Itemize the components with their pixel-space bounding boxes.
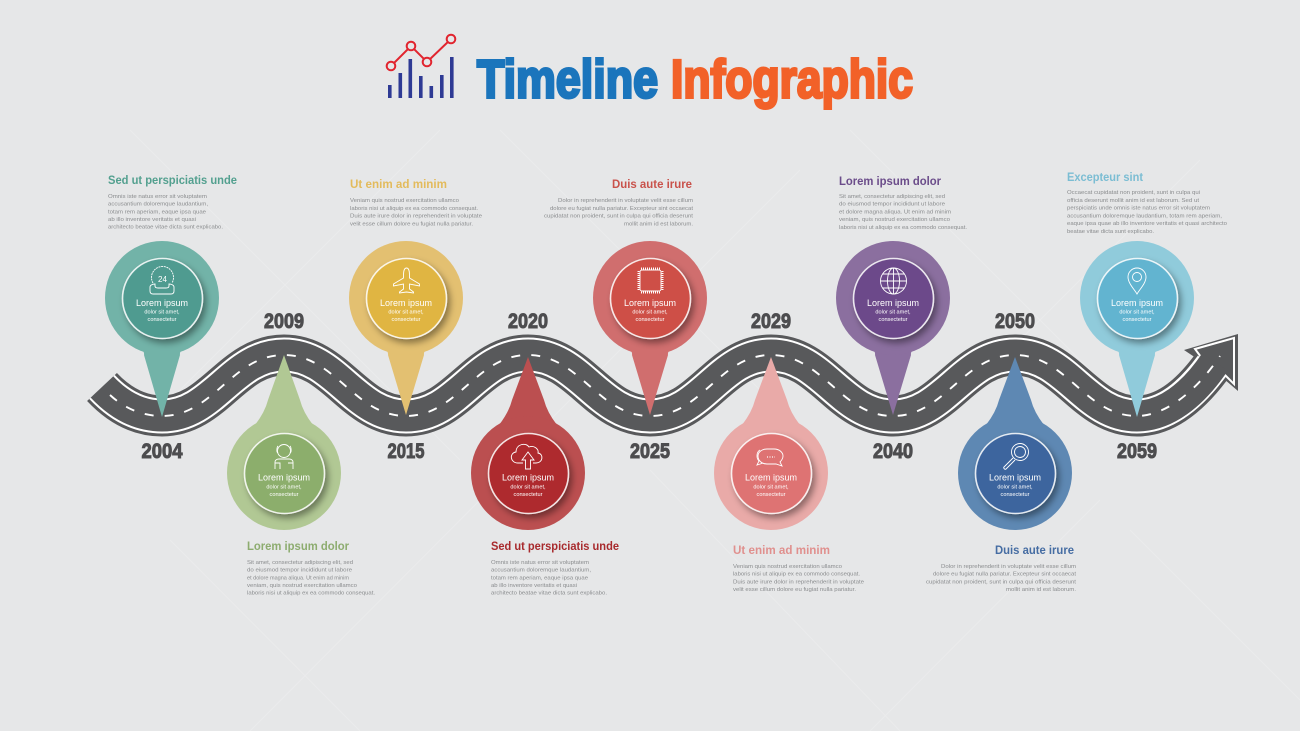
pin 2004: support	[105, 241, 219, 417]
pin 2009: headset agent: consectetur	[270, 492, 299, 498]
icon: chat bubbles	[757, 449, 783, 466]
pin 2025: microchip: Lorem ipsum	[624, 298, 676, 308]
pin 2025: microchip: consectetur	[636, 317, 665, 323]
pin 2004: support: consectetur	[148, 317, 177, 323]
text block: Ut enim ad minim (yellow): Ut enim ad minim	[350, 179, 447, 191]
text block: Lorem ipsum dolor (purple): do eiusmod tempor incididunt ut labore	[839, 202, 945, 208]
text block: Ut enim ad minim (pink): velit esse cillum dolore eu fugiat nulla pariatur.	[733, 587, 856, 593]
pin 2040: globe	[836, 241, 950, 415]
text block: Lorem ipsum dolor (green): laboris nisi ut aliquip ex ea commodo consequat.	[247, 591, 375, 597]
pin 2020: cloud upload: Lorem ipsum	[502, 472, 554, 482]
text block: Sed ut perspiciatis unde (dark red): accusantium doloremque laudantium,	[491, 568, 591, 574]
title	[387, 35, 913, 110]
text block: Ut enim ad minim (yellow): laboris nisi ut aliquip ex ea commodo consequat.	[350, 206, 478, 212]
text block: Sed ut perspiciatis unde (dark red): totam rem aperiam, eaque ipsa quae	[491, 575, 588, 581]
pin 2040: globe: Lorem ipsum	[867, 298, 919, 308]
icon: plane	[394, 268, 420, 293]
icon: globe	[880, 268, 906, 294]
pin 2009: headset agent: dolor sit amet,	[266, 484, 302, 490]
year labels: 2015	[388, 440, 425, 463]
title word: Infographic: Infographic	[671, 50, 913, 110]
year labels: 2029	[751, 310, 791, 333]
text block: Sed ut perspiciatis unde (dark red): Sed ut perspiciatis unde	[491, 541, 619, 553]
pin 2004: support: Lorem ipsum	[136, 298, 188, 308]
text block: Lorem ipsum dolor (green): veniam, quis nostrud exercitation ullamco	[247, 583, 357, 589]
text block: Sed ut perspiciatis unde (dark red): architecto beatae vitae dicta sunt explicabo.	[491, 591, 607, 597]
icon: chart with trend line	[387, 35, 455, 98]
text block: Duis aute irure (blue): dolore eu fugiat nulla pariatur. Excepteur sint occaecat	[933, 572, 1076, 578]
pin 2029: chat bubbles	[714, 357, 828, 530]
pin 2015: plane	[349, 241, 463, 415]
text block: Ut enim ad minim (yellow)	[350, 179, 482, 227]
text block: Sed ut perspiciatis unde (teal): ab illo inventore veritatis et quasi	[108, 217, 196, 223]
text block: Ut enim ad minim (pink): Ut enim ad minim	[733, 545, 830, 557]
text block: Duis aute irure (coral): Dolor in reprehenderit in voluptate velit esse cillum	[558, 198, 693, 204]
text block: Excepteur sint (cyan)	[1067, 172, 1227, 235]
icon: headset agent	[275, 444, 293, 469]
pin 2015: plane: Lorem ipsum	[380, 298, 432, 308]
text block: Duis aute irure (coral): dolore eu fugiat nulla pariatur. Excepteur sint occaecat	[550, 206, 693, 212]
pin 2025: microchip: dolor sit amet,	[632, 310, 668, 316]
pin 2025: microchip	[593, 241, 707, 415]
text block: Lorem ipsum dolor (green): Sit amet, consectetur adipiscing elit, sed	[247, 560, 353, 566]
pin 2050: magnifier: Lorem ipsum	[989, 472, 1041, 482]
pin 2029: chat bubbles: Lorem ipsum	[745, 472, 797, 482]
pin 2050: magnifier: consectetur	[1001, 492, 1030, 498]
text block: Duis aute irure (coral)	[544, 179, 693, 227]
text block: Sed ut perspiciatis unde (teal)	[108, 175, 237, 231]
text block: Lorem ipsum dolor (purple): et dolore magna aliqua. Ut enim ad minim	[839, 209, 951, 215]
text block: Lorem ipsum dolor (purple)	[839, 176, 967, 231]
icon: 24 hour phone	[150, 266, 174, 294]
text block: Sed ut perspiciatis unde (dark red)	[491, 541, 619, 597]
year labels: 2009	[264, 310, 304, 333]
icon: magnifier	[1004, 444, 1028, 469]
text block: Ut enim ad minim (pink): laboris nisi ut aliquip ex ea commodo consequat.	[733, 572, 860, 578]
pin 2050: magnifier: dolor sit amet,	[997, 484, 1033, 490]
pin 2029: chat bubbles: dolor sit amet,	[753, 484, 789, 490]
text block: Sed ut perspiciatis unde (teal): Sed ut perspiciatis unde	[108, 175, 237, 187]
text block: Excepteur sint (cyan): officia deserunt mollit anim id est laborum. Sed ut	[1067, 198, 1199, 204]
text block: Sed ut perspiciatis unde (teal): architecto beatae vitae dicta sunt explicabo.	[108, 225, 223, 231]
pin 2004: support: 24	[158, 275, 167, 284]
text block: Excepteur sint (cyan): eaque ipsa quae ab illo inventore veritatis et quasi architecto	[1067, 221, 1227, 227]
text block: Ut enim ad minim (yellow): Veniam quis nostrud exercitation ullamco	[350, 198, 459, 204]
text block: Lorem ipsum dolor (purple): veniam, quis nostrud exercitation ullamco	[839, 217, 950, 223]
pin 2059: location marker: Lorem ipsum	[1111, 298, 1163, 308]
text block: Duis aute irure (coral): mollit anim id est laborum.	[624, 221, 693, 227]
text block: Duis aute irure (coral): Duis aute irure	[612, 179, 692, 191]
text block: Lorem ipsum dolor (green): do eiusmod tempor incididunt ut labore	[247, 568, 352, 574]
pin 2004: support: dolor sit amet,	[144, 310, 180, 316]
pin 2009: headset agent: Lorem ipsum	[258, 472, 310, 482]
icon: microchip	[638, 268, 662, 292]
pin 2059: location marker: consectetur	[1123, 317, 1152, 323]
text block: Excepteur sint (cyan): accusantium doloremque laudantium, totam rem aperiam,	[1067, 213, 1222, 219]
winding road with arrow	[102, 334, 1238, 416]
text block: Sed ut perspiciatis unde (dark red): ab illo inventore veritatis et quasi	[491, 583, 577, 589]
text block: Ut enim ad minim (yellow): Duis aute irure dolor in reprehenderit in voluptate	[350, 214, 482, 220]
text block: Duis aute irure (blue): cupidatat non proident, sunt in culpa qui officia deserunt	[926, 579, 1076, 585]
text block: Ut enim ad minim (pink): Duis aute irure dolor in reprehenderit in voluptate	[733, 579, 864, 585]
icon: cloud upload	[511, 444, 542, 469]
year labels: 2040	[873, 440, 913, 463]
text block: Ut enim ad minim (pink): Veniam quis nostrud exercitation ullamco	[733, 564, 842, 570]
pin 2009: headset agent	[227, 355, 341, 530]
text block: Sed ut perspiciatis unde (teal): accusantium doloremque laudantium,	[108, 202, 208, 208]
text block: Duis aute irure (coral): cupidatat non proident, sunt in culpa qui officia deserunt	[544, 214, 693, 220]
pin 2040: globe: consectetur	[879, 317, 908, 323]
text block: Lorem ipsum dolor (purple): laboris nisi ut aliquip ex ea commodo consequat.	[839, 225, 967, 231]
text block: Excepteur sint (cyan): Excepteur sint	[1067, 172, 1143, 184]
text block: Lorem ipsum dolor (green)	[247, 541, 375, 597]
text block: Ut enim ad minim (yellow): velit esse cillum dolore eu fugiat nulla pariatur.	[350, 221, 473, 227]
icon: location marker	[1128, 268, 1146, 294]
year labels	[142, 310, 1157, 463]
year labels: 2025	[630, 440, 670, 463]
text block: Duis aute irure (blue): Duis aute irure	[995, 545, 1074, 557]
year labels: 2059	[1117, 440, 1157, 463]
pin 2020: cloud upload	[471, 357, 585, 530]
pin 2015: plane: consectetur	[392, 317, 421, 323]
pin 2020: cloud upload: consectetur	[514, 492, 543, 498]
text block: Lorem ipsum dolor (green): et dolore magna aliqua. Ut enim ad minim	[247, 575, 349, 581]
text block: Duis aute irure (blue): mollit anim id est laborum.	[1006, 587, 1076, 593]
text block: Excepteur sint (cyan): Occaecat cupidatat non proident, sunt in culpa qui	[1067, 190, 1200, 196]
pin 2040: globe: dolor sit amet,	[875, 310, 911, 316]
text block: Lorem ipsum dolor (green): Lorem ipsum dolor	[247, 541, 350, 553]
text block: Ut enim ad minim (pink)	[733, 545, 864, 593]
pin 2059: location marker	[1080, 241, 1194, 417]
text block: Duis aute irure (blue)	[926, 545, 1076, 593]
text block: Lorem ipsum dolor (purple): Sit amet, consectetur adipiscing elit, sed	[839, 194, 945, 200]
pin 2020: cloud upload: dolor sit amet,	[510, 484, 546, 490]
year labels: 2004	[142, 440, 183, 463]
text block: Sed ut perspiciatis unde (teal): Omnis iste natus error sit voluptatem	[108, 194, 207, 200]
text block: Excepteur sint (cyan): beatae vitae dicta sunt explicabo.	[1067, 229, 1154, 235]
pin 2050: magnifier	[958, 357, 1072, 530]
pin 2029: chat bubbles: consectetur	[757, 492, 786, 498]
text block: Lorem ipsum dolor (purple): Lorem ipsum dolor	[839, 176, 942, 188]
year labels: 2050	[995, 310, 1035, 333]
text block: Duis aute irure (blue): Dolor in reprehenderit in voluptate velit esse cillum	[941, 564, 1076, 570]
pin 2015: plane: dolor sit amet,	[388, 310, 424, 316]
text block: Sed ut perspiciatis unde (teal): totam rem aperiam, eaque ipsa quae	[108, 209, 206, 215]
text block: Excepteur sint (cyan): perspiciatis unde omnis iste natus error sit voluptatem	[1067, 206, 1210, 212]
text block: Sed ut perspiciatis unde (dark red): Omnis iste natus error sit voluptatem	[491, 560, 589, 566]
title word: Timeline: Timeline	[477, 50, 658, 110]
year labels: 2020	[508, 310, 548, 333]
pin 2059: location marker: dolor sit amet,	[1119, 310, 1155, 316]
